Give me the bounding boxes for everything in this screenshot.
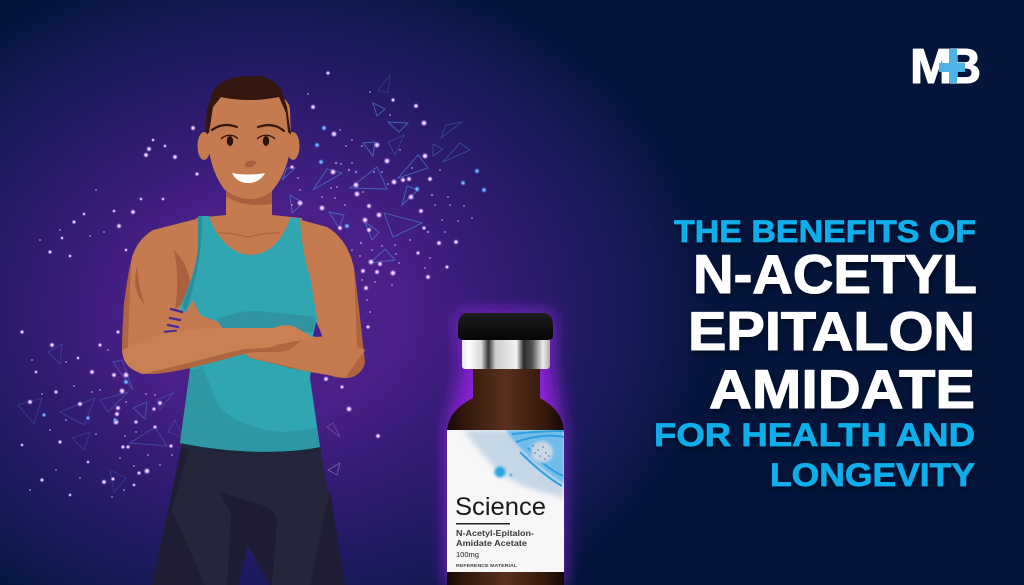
title line 6: LONGEVITY (770, 457, 975, 493)
hair (205, 76, 291, 135)
label rule (456, 523, 510, 524)
black cap (458, 313, 553, 340)
teal tank top (180, 216, 323, 452)
collarbone line (218, 233, 280, 237)
back hand with purple nails (165, 300, 224, 345)
dose: 100mg (456, 550, 479, 559)
title line 2: N-ACETYL (693, 244, 977, 305)
title line 4: AMIDATE (709, 359, 975, 420)
title line 5: FOR HEALTH AND (654, 417, 975, 453)
shorts (152, 442, 345, 585)
particle triangles (18, 75, 470, 492)
label (447, 430, 564, 572)
logo (910, 40, 981, 94)
particle dots (20, 70, 487, 498)
eyes (221, 135, 275, 146)
shoulders and upper arms (122, 217, 365, 378)
eyebrows (212, 125, 284, 131)
neck and chest (196, 186, 302, 300)
label: Amidate Acetate (456, 539, 528, 548)
face (208, 90, 291, 199)
man illustration (122, 76, 365, 585)
crossed forearms (122, 325, 365, 378)
nose (245, 161, 256, 167)
ears (198, 132, 300, 160)
title block (654, 213, 977, 493)
smile (232, 173, 265, 183)
brand name: Science (455, 493, 546, 521)
product name: N-Acetyl-Epitalon- (456, 529, 534, 538)
purple glow (447, 313, 563, 585)
title line 1: THE BENEFITS OF (674, 213, 976, 249)
title line 3: EPITALON (688, 301, 975, 362)
product vial (447, 313, 564, 585)
watercolor art (464, 430, 564, 498)
logo: B (947, 40, 981, 94)
metal collar (462, 336, 550, 369)
reference material: REFERENCE MATERIAL (456, 563, 517, 568)
vial glass (447, 365, 564, 585)
logo: M (910, 40, 952, 94)
